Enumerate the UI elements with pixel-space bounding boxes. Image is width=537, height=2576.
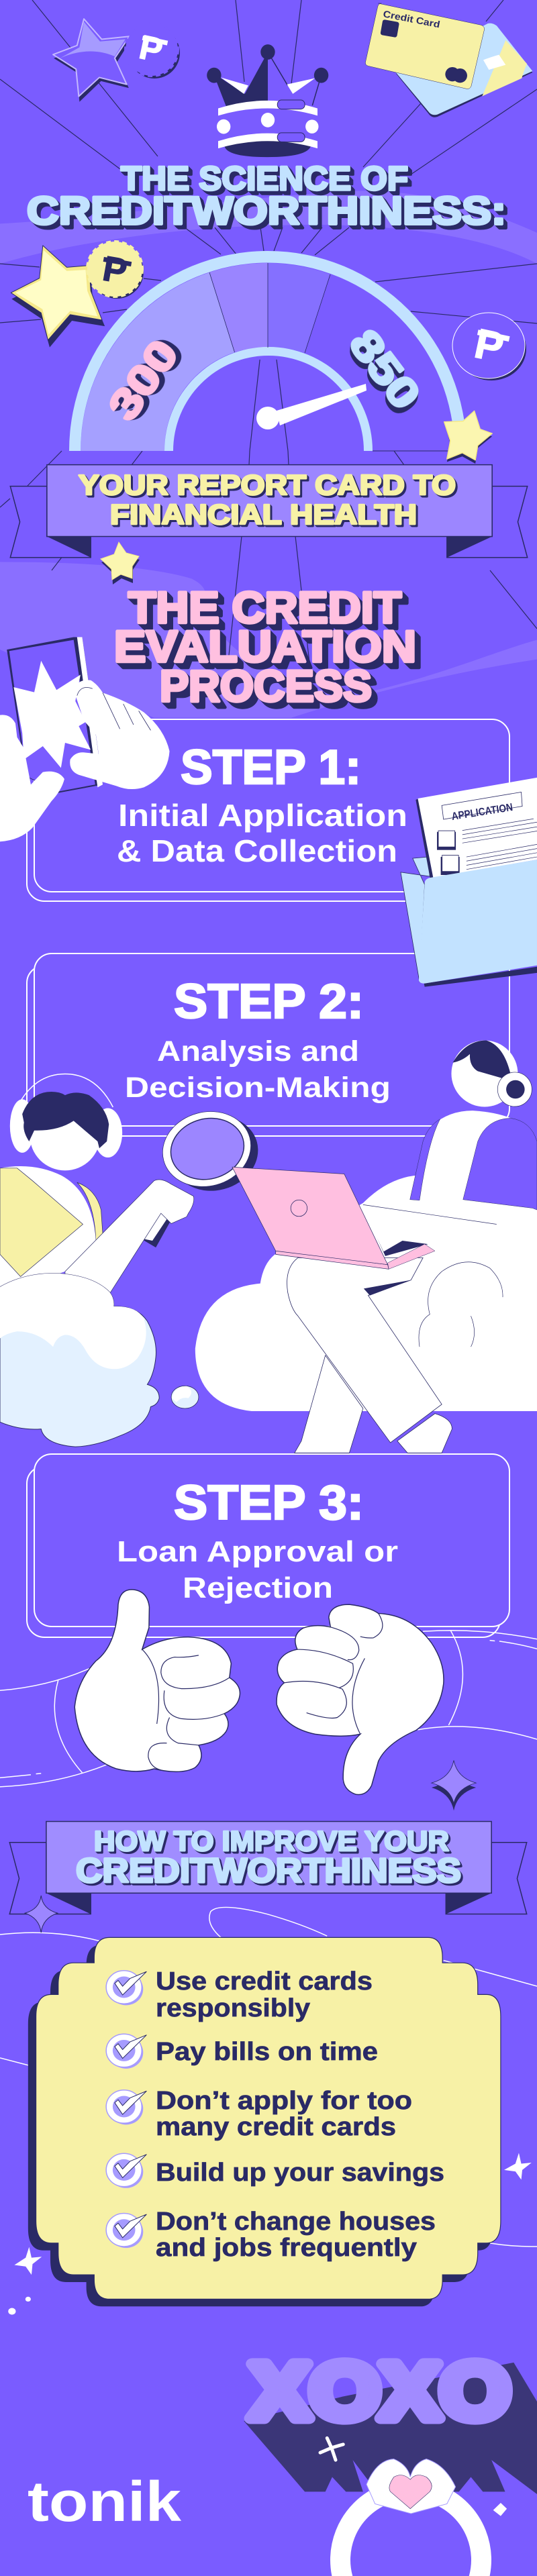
banner heading: HOW TO IMPROVE YOUR	[94, 1825, 449, 1857]
tips text	[156, 1967, 444, 2262]
ribbon banner: how to improve	[9, 1822, 527, 1914]
logo: tonik: tonik	[28, 2470, 181, 2533]
icon: peso coin purple: P	[136, 28, 166, 70]
panel: step 3	[27, 1454, 509, 1637]
section heading: THE CREDIT	[128, 582, 401, 632]
icon: crown	[207, 44, 328, 157]
gauge chart	[69, 251, 467, 451]
icon: thumbs down	[277, 1604, 444, 1795]
banner heading: CREDITWORTHINESS	[76, 1851, 461, 1890]
icon: credit cards	[365, 3, 532, 117]
panel: step 3: Loan Approval or	[117, 1535, 398, 1568]
tips text: Build up your savings	[156, 2159, 444, 2187]
icon: yellow star	[11, 246, 105, 348]
section heading: PROCESS	[160, 661, 372, 711]
icon: thumbs up	[75, 1590, 240, 1771]
background rays	[0, 0, 537, 669]
panel: step 2: Decision-Making	[125, 1072, 391, 1104]
banner text: FINANCIAL HEALTH	[110, 499, 417, 530]
icon: star under banner	[101, 542, 140, 584]
banner heading	[76, 1825, 461, 1890]
panel: step 3: STEP 3:	[174, 1476, 364, 1530]
icon: peso coin purple	[126, 23, 180, 79]
panel: step 2: STEP 2:	[174, 975, 364, 1029]
panel: step 1: & Data Collection	[117, 833, 397, 868]
sleeve lines	[0, 1630, 537, 1787]
decorative curves and sparkles	[0, 1896, 537, 2315]
panel: step 2: Analysis and	[157, 1035, 359, 1068]
illustration: left cloud	[0, 1273, 199, 1447]
illustration: left person with magnifier	[0, 1074, 266, 1294]
icon: peso coin yellow	[87, 242, 144, 299]
icon: peso coin right: P	[471, 321, 507, 372]
tips text: Don’t apply for too	[156, 2087, 412, 2115]
tips text: Pay bills on time	[156, 2038, 378, 2066]
title: THE SCIENCE OF	[121, 160, 408, 197]
background swoosh: lower	[0, 562, 537, 718]
icon: peso coin yellow: P	[100, 249, 130, 292]
background swoosh: upper	[0, 191, 537, 264]
tips text: responsibly	[156, 1994, 310, 2022]
panel: step 1	[27, 719, 509, 901]
XOXO shadow	[244, 2363, 537, 2494]
gauge label: 850: 850	[340, 321, 429, 418]
gauge label: 300: 300	[100, 332, 187, 429]
banner text: YOUR REPORT CARD TO	[79, 469, 456, 501]
ribbon banner: report card	[10, 465, 528, 558]
panel: step 2	[27, 954, 509, 1136]
icon: peso coin right	[452, 313, 526, 380]
title: CREDITWORTHINESS:	[27, 189, 506, 233]
section heading	[114, 582, 416, 711]
panel: step 1: Initial Application	[118, 798, 407, 833]
icon: sparkle	[432, 1760, 476, 1810]
section heading: EVALUATION	[114, 621, 416, 671]
panel: tips list	[28, 1937, 501, 2306]
panel: step 1: STEP 1:	[181, 741, 361, 794]
tips text: Use credit cards	[156, 1967, 373, 1996]
icon: small yellow star right	[444, 411, 492, 464]
banner text	[79, 469, 456, 530]
icon: application folder	[401, 778, 537, 987]
XOXO text: XOXO	[250, 2347, 510, 2436]
icon: purple star	[53, 19, 131, 102]
illustration: right person with laptop	[195, 1041, 537, 1453]
icon: heart hands	[320, 2438, 507, 2576]
text: application label: APPLICATION	[451, 802, 514, 823]
text: credit card label: Credit Card	[382, 8, 441, 30]
title	[27, 160, 506, 233]
tips text: Don’t change houses	[156, 2208, 436, 2236]
panel: step 3: Rejection	[183, 1572, 333, 1604]
tips text: many credit cards	[156, 2113, 396, 2141]
icon: phone with hands	[0, 637, 170, 841]
tips text: and jobs frequently	[156, 2234, 417, 2262]
